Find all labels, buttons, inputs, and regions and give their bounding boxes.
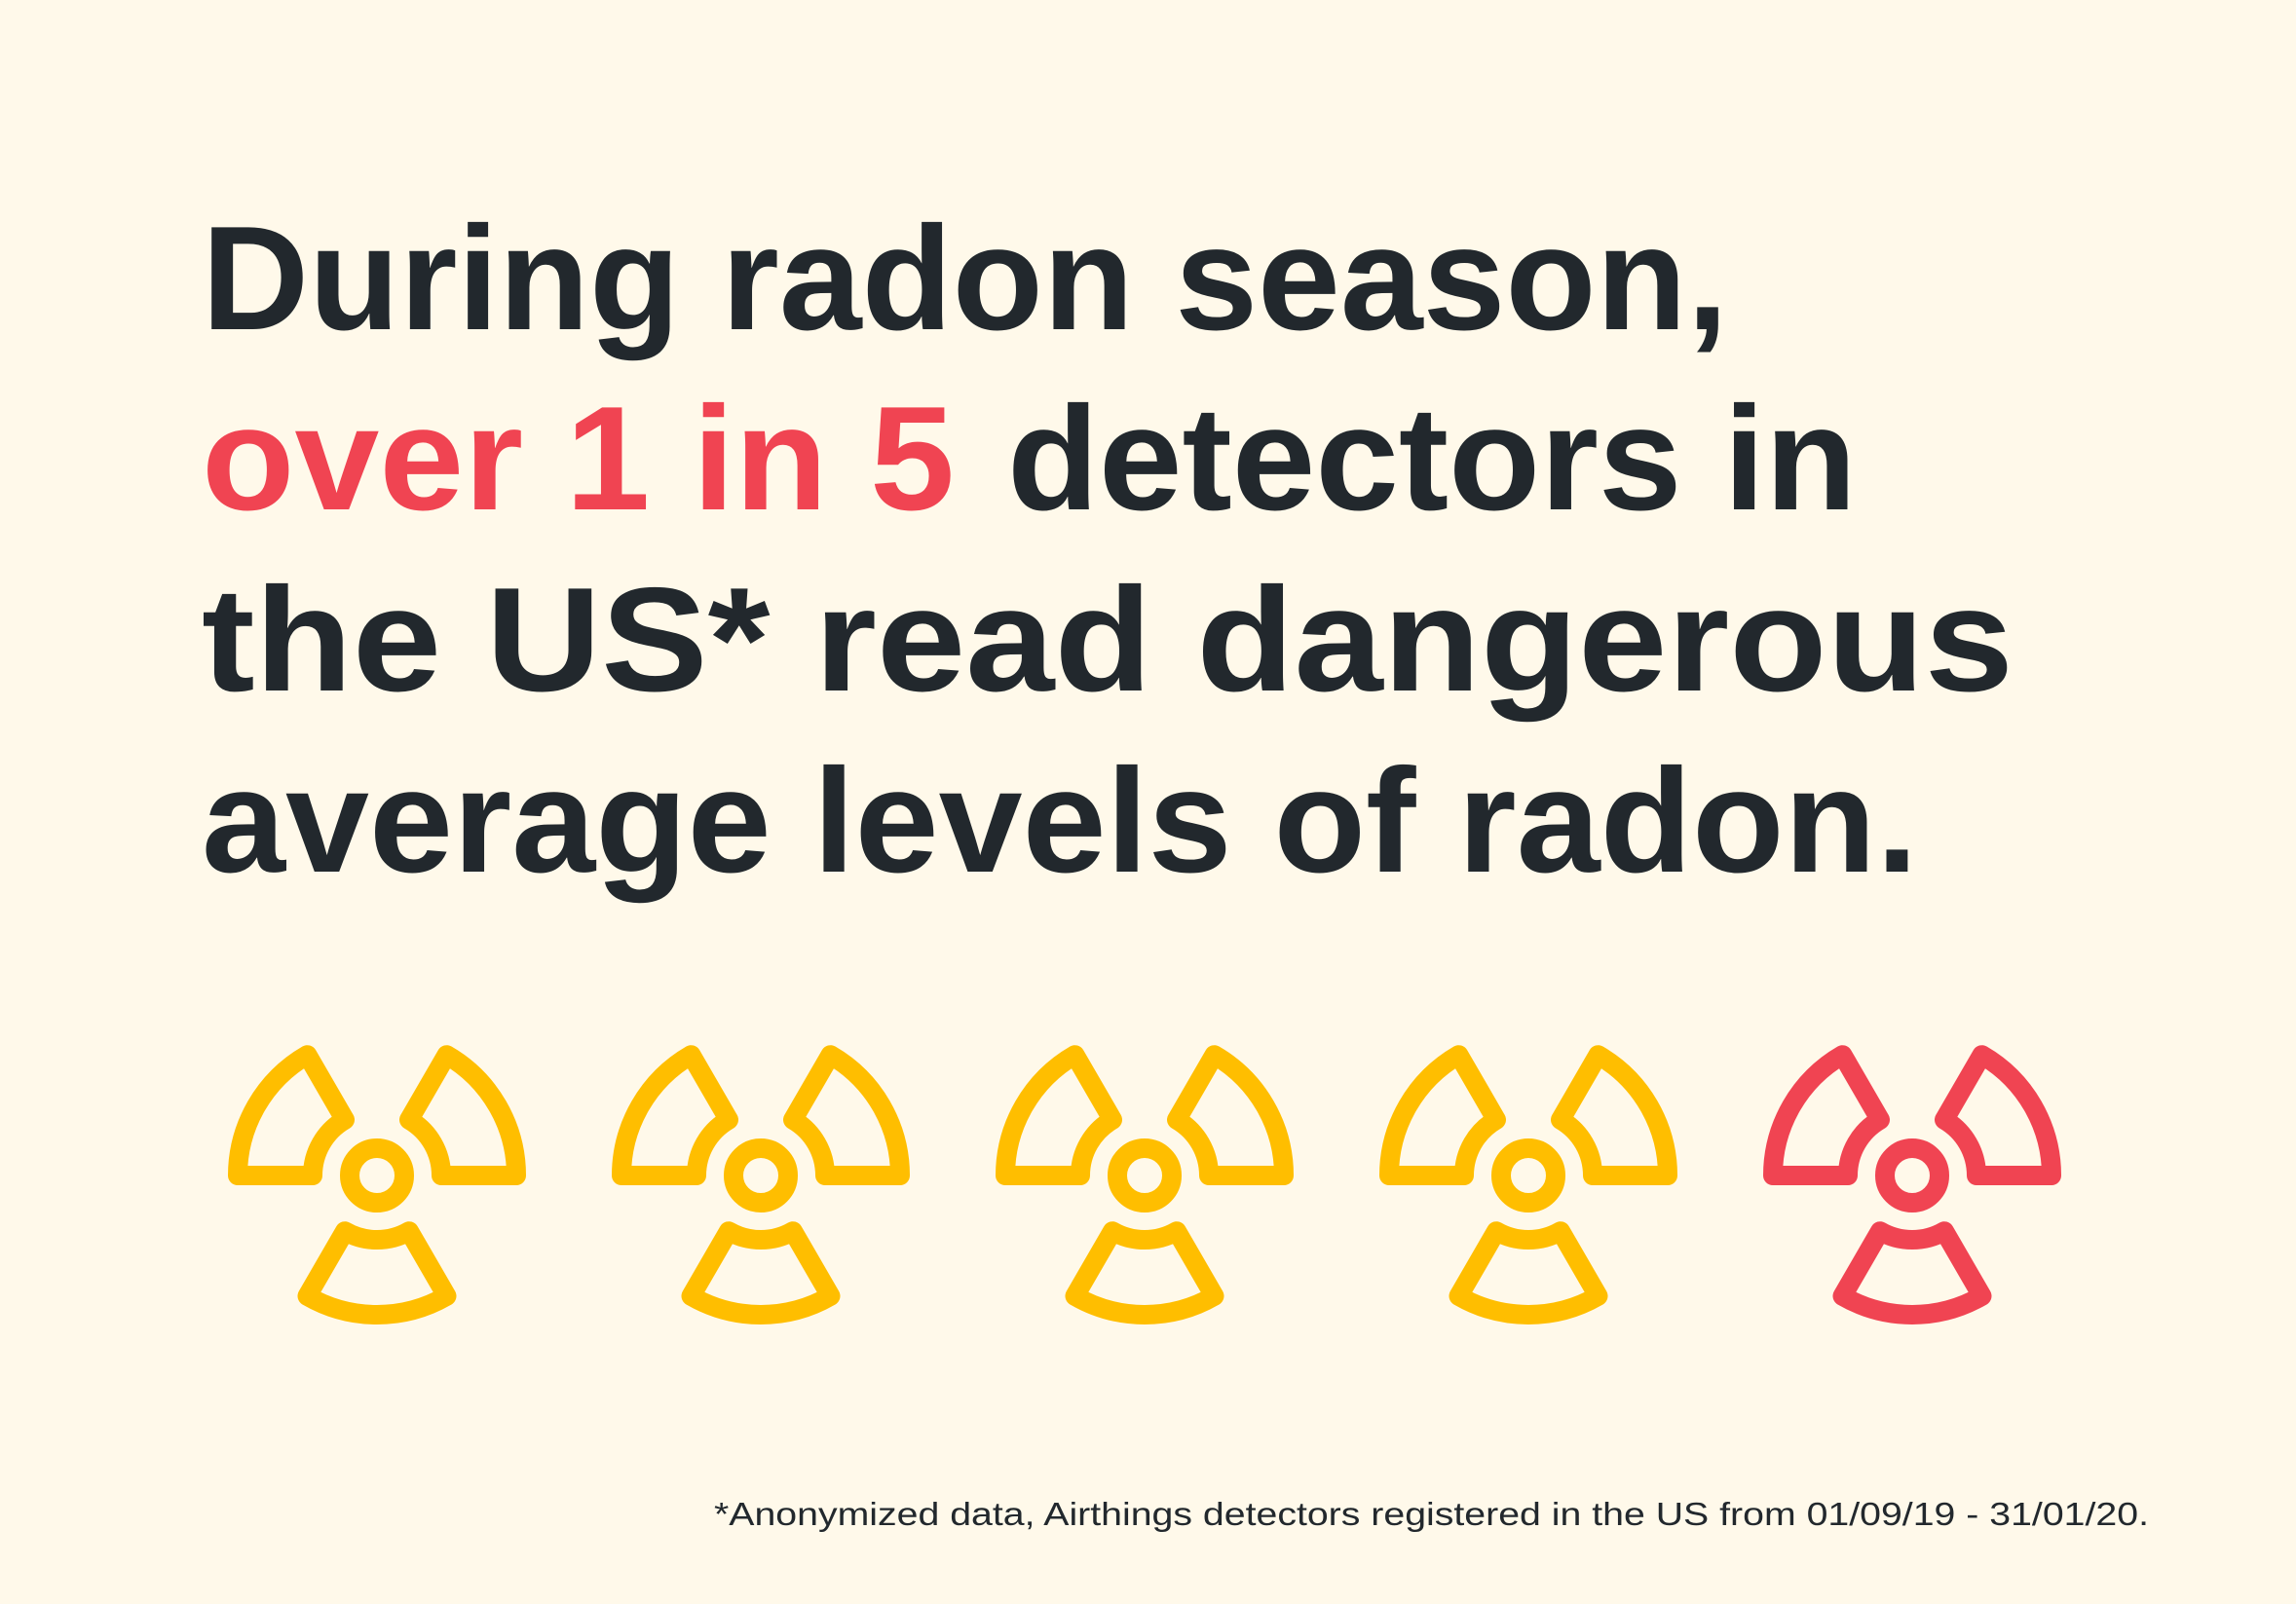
title: over 1 in 5 (202, 376, 955, 541)
icon: radiation 4 (1389, 1055, 1668, 1315)
icons row: radiation symbols (238, 1055, 2051, 1315)
icon: radiation 1 (238, 1055, 516, 1315)
icon: radiation 3 (1005, 1055, 1284, 1315)
icon: radiation 5 (red) (1773, 1055, 2051, 1315)
title (202, 196, 2014, 904)
title: During radon season, (202, 196, 1728, 361)
title: average levels of radon. (202, 738, 1918, 904)
footnote: *Anonymized data, Airthings detectors registered in the US from 01/09/19 - 31/01/20. (714, 1496, 2149, 1532)
title: the US* read dangerous (202, 557, 2014, 723)
title: detectors in (1007, 376, 1857, 541)
icon: radiation 2 (621, 1055, 900, 1315)
